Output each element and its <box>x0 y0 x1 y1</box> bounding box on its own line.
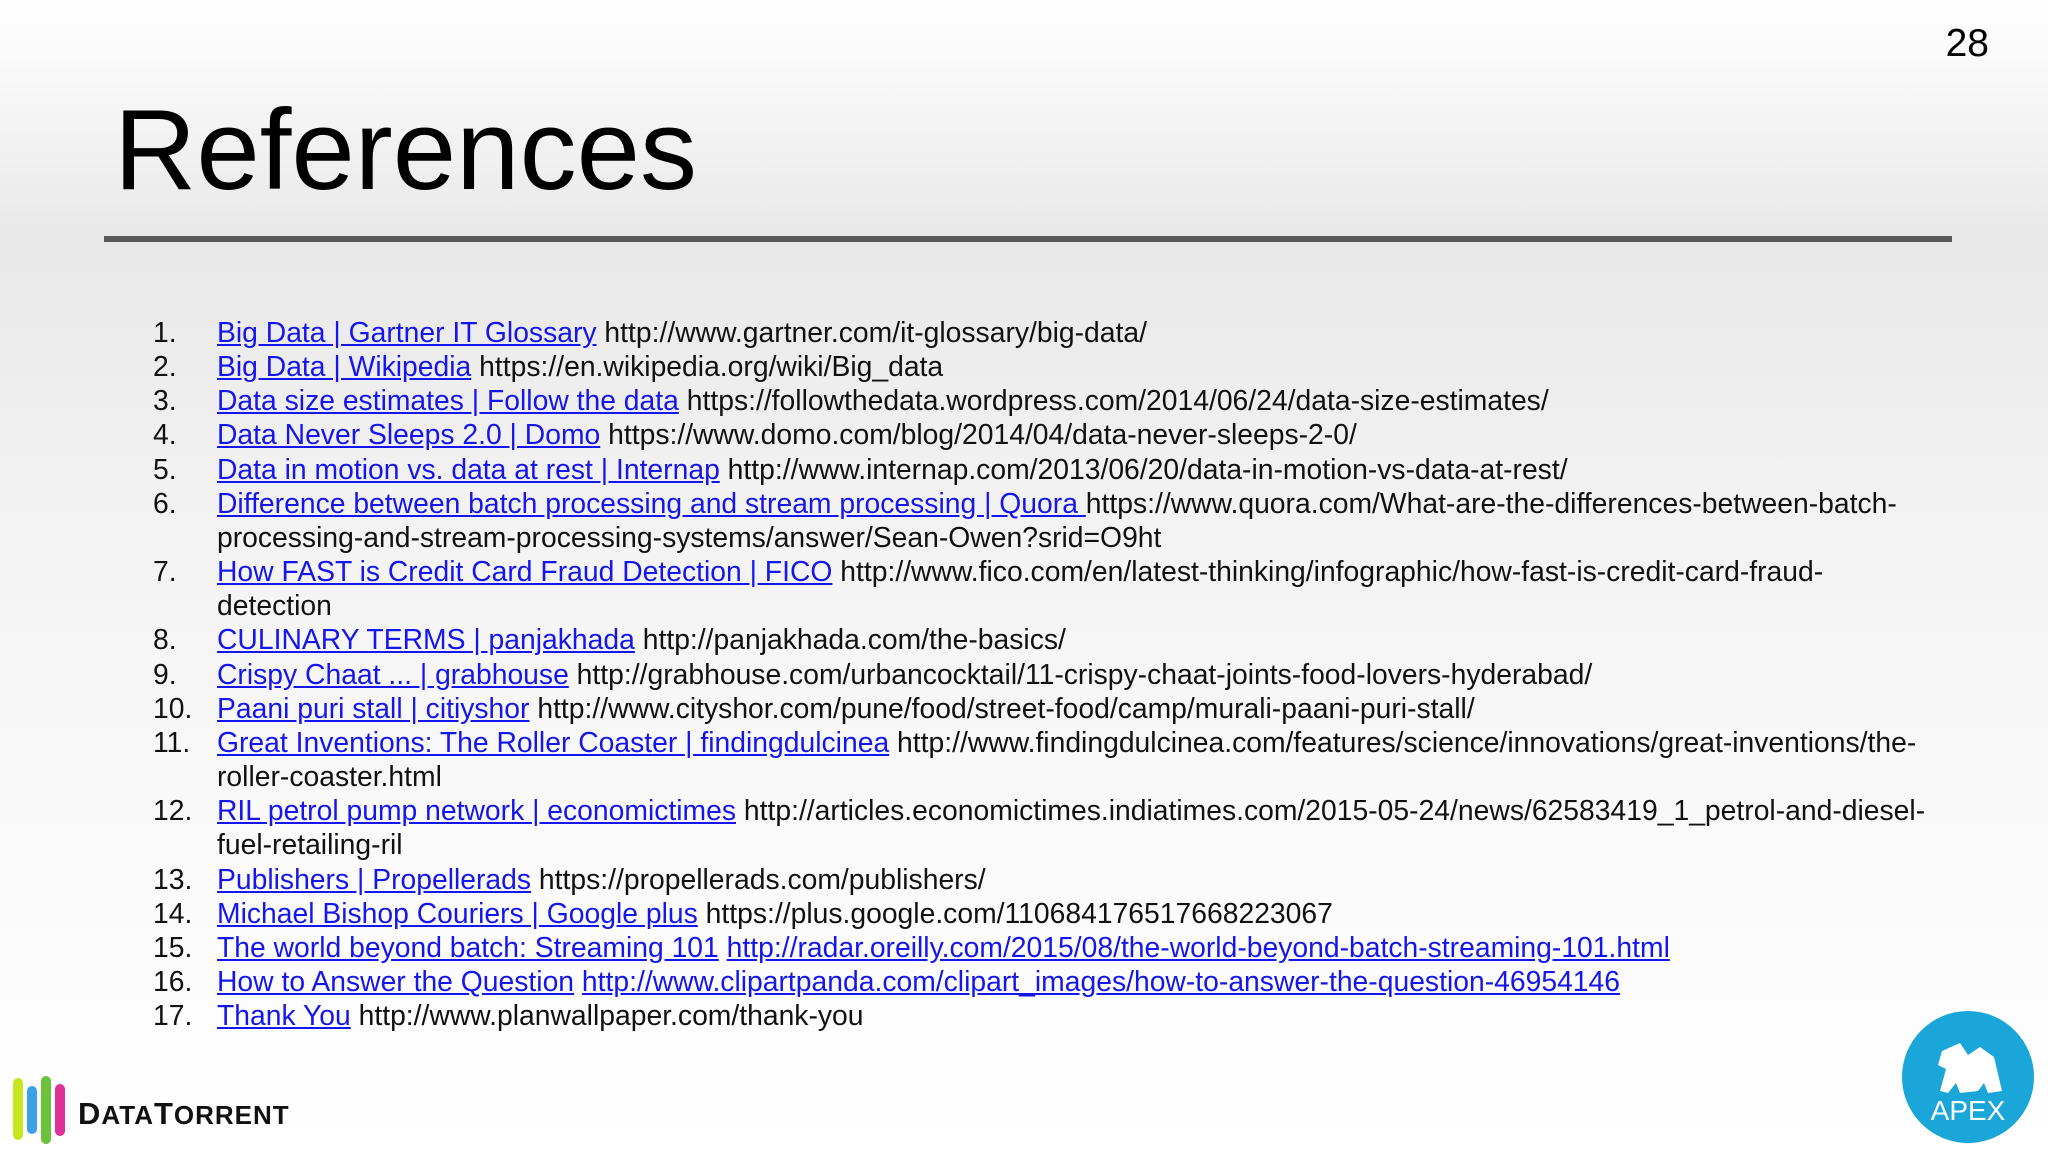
reference list: 7. <box>153 555 177 587</box>
reference list: roller-coaster.html <box>217 760 442 792</box>
reference list: Publishers | Propellerads https://propellerads.com/publishers/ <box>217 862 986 894</box>
reference list: 6. <box>153 487 177 519</box>
reference list: 12. <box>153 794 192 826</box>
reference list: 4. <box>153 418 177 450</box>
reference list: 17. <box>153 999 192 1031</box>
reference list: 9. <box>153 658 177 690</box>
title: References <box>114 87 697 214</box>
reference list: 8. <box>153 623 177 655</box>
logo: DataTorrent <box>13 1076 290 1144</box>
reference list: Difference between batch processing and stream processing | Quora https://www.quora.com/What-are-the-differences-between-batch-processing-and-stream-processing-systems/answer/Sean-Owen?srid=O9ht <box>217 487 1897 553</box>
reference list: Data size estimates | Follow the data https://followthedata.wordpress.com/2014/06/24/data-size-estimates/ <box>217 384 1549 416</box>
reference list: 11. <box>153 726 190 758</box>
reference list: detection <box>217 589 332 621</box>
reference list: 3. <box>153 384 177 416</box>
logo text: APEX <box>1931 1095 2005 1126</box>
reference list: Great Inventions: The Roller Coaster | findingdulcinea http://www.findingdulcinea.com/features/science/innovations/great-inventions/the- <box>217 726 1916 758</box>
reference list: Michael Bishop Couriers | Google plus https://plus.google.com/110684176517668223067 <box>217 897 1333 929</box>
reference list: Thank You http://www.planwallpaper.com/thank-you <box>217 999 864 1031</box>
reference list: Big Data | Wikipedia https://en.wikipedia.org/wiki/Big_data <box>217 350 943 382</box>
reference list: 14. <box>153 897 192 929</box>
page number: 28 <box>1946 22 1989 65</box>
reference list: 1. <box>153 316 177 348</box>
reference list: CULINARY TERMS | panjakhada http://panjakhada.com/the-basics/ <box>217 623 1066 655</box>
reference list: How to Answer the Question http://www.clipartpanda.com/clipart_images/how-to-answer-the-question-46954146 <box>217 965 1620 997</box>
reference list: How FAST is Credit Card Fraud Detection | FICO http://www.fico.com/en/latest-thinking/infographic/how-fast-is-credit-card-fraud- <box>217 555 1823 587</box>
reference list: 13. <box>153 862 192 894</box>
reference list: fuel-retailing-ril <box>217 828 403 860</box>
reference list: 5. <box>153 453 177 485</box>
reference list: RIL petrol pump network | economictimes http://articles.economictimes.indiatimes.com/2015-05-24/news/62583419_1_petrol-and-diesel- <box>217 794 1925 826</box>
reference list <box>153 316 1925 1031</box>
reference list: Big Data | Gartner IT Glossary http://www.gartner.com/it-glossary/big-data/ <box>217 316 1147 348</box>
logo: Apex <box>1902 1011 2034 1143</box>
reference list: Data Never Sleeps 2.0 | Domo https://www.domo.com/blog/2014/04/data-never-sleeps-2-0/ <box>217 418 1357 450</box>
reference list: Data in motion vs. data at rest | Internap http://www.internap.com/2013/06/20/data-in-motion-vs-data-at-rest/ <box>217 453 1568 485</box>
reference list: 15. <box>153 931 192 963</box>
reference list: 16. <box>153 965 192 997</box>
icon: colored bars <box>13 1076 65 1144</box>
icon: gorilla <box>1938 1043 2002 1093</box>
reference list: Crispy Chaat ... | grabhouse http://grabhouse.com/urbancocktail/11-crispy-chaat-joints-food-lovers-hyderabad/ <box>217 658 1592 690</box>
reference list: 10. <box>153 692 192 724</box>
reference list: 2. <box>153 350 177 382</box>
reference list: The world beyond batch: Streaming 101 http://radar.oreilly.com/2015/08/the-world-beyond-batch-streaming-101.html <box>217 931 1670 963</box>
logo text: DATATORRENT <box>78 1096 290 1131</box>
reference list: Paani puri stall | citiyshor http://www.cityshor.com/pune/food/street-food/camp/murali-paani-puri-stall/ <box>217 692 1475 724</box>
